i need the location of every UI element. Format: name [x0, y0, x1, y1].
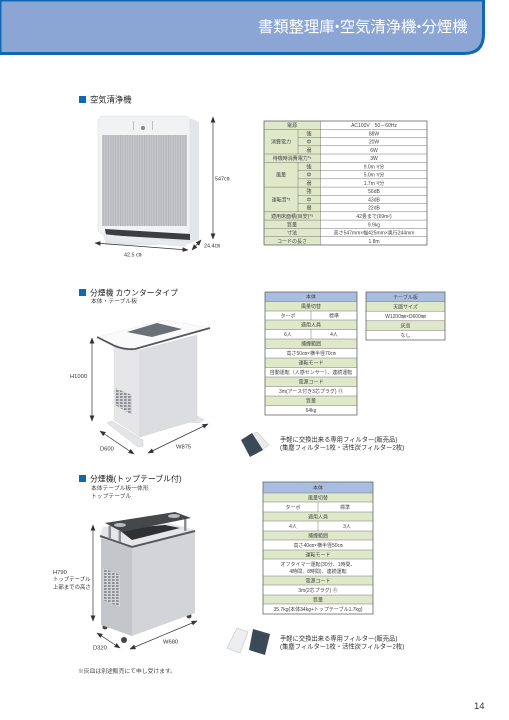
table: top table main body: オフタイマー運転(30分、1時間、: [280, 561, 356, 568]
table: air purifier specs: 風量: [276, 172, 286, 179]
table: top table main body: 風量切替: [308, 494, 328, 502]
table: air purifier specs: [264, 121, 427, 245]
table: top table main body: [263, 482, 373, 614]
table: top table main body: 本体: [313, 484, 323, 492]
heading: top table smoke separator: [79, 474, 182, 500]
dimension: width 42.5: [95, 243, 188, 258]
text: filter note 2: [280, 634, 404, 650]
table: air purifier specs: 弱: [306, 206, 312, 212]
table: air purifier specs: 22dB: [368, 206, 380, 212]
table: counter type main body: 64kg: [306, 408, 317, 414]
title: 書類整理庫・空気清浄機・分煙機: [258, 19, 468, 36]
table: air purifier specs: 20W: [369, 140, 379, 146]
table: air purifier specs: 5.0m ³/分: [364, 172, 384, 179]
table: air purifier specs: 1.8m: [368, 239, 380, 245]
dimension: D600: [100, 431, 134, 454]
table: air purifier specs: 中: [306, 139, 312, 146]
table: table board: [366, 292, 445, 340]
table: air purifier specs: 強: [306, 188, 312, 195]
table: top table main body: 適用人員: [308, 514, 328, 520]
heading: top table smoke separator: 分煙機(トップテーブル付): [90, 474, 182, 484]
table: counter type main body: 運転モード: [298, 360, 324, 367]
table: counter type main body: 捕煙範囲: [301, 341, 321, 348]
table: top table main body: 3人: [343, 524, 351, 530]
table: air purifier specs: 強: [306, 130, 312, 137]
table: air purifier specs: AC100V 50－60Hz: [351, 123, 397, 129]
dimension: H790: [53, 525, 93, 621]
table: counter type main body: [265, 292, 357, 415]
dimension: D320: [93, 633, 120, 652]
dimension: D320: D320: [93, 646, 107, 652]
table: counter type main body: 風量切替: [301, 303, 321, 310]
table: air purifier specs: 42畳まで(69m²): [356, 214, 392, 220]
table: air purifier specs: 運転音*²: [272, 196, 291, 204]
table: air purifier specs: 43dB: [368, 198, 380, 204]
heading: air purifier: 空気清浄機: [90, 94, 132, 104]
table: air purifier specs: 中: [306, 172, 312, 179]
table: top table main body: 3m(2芯プラグ) ⑪: [298, 587, 338, 594]
dimension: H1000: H1000: [70, 374, 87, 380]
dimension: W875: [148, 424, 208, 453]
table: counter type main body: 適用人員: [301, 322, 321, 329]
dimension: W680: W680: [163, 640, 178, 646]
heading: top table smoke separator: トップテーブル: [91, 492, 131, 500]
table: air purifier specs: 強: [306, 164, 312, 170]
table: air purifier specs: 待機時消費電力*¹: [273, 155, 312, 162]
table: air purifier specs: 寸法: [287, 230, 297, 236]
table: air purifier specs: 質量: [287, 221, 297, 228]
table: counter type main body: 6人: [284, 332, 292, 338]
dimension: height 547: 547㎝: [215, 176, 230, 182]
table: air purifier specs: コードの長さ: [277, 238, 307, 245]
table: air purifier specs: 1.7m ³/分: [364, 180, 384, 187]
dimension: depth 24.4: [192, 240, 220, 250]
dimension: depth 24.4: 24.4㎝: [204, 244, 220, 250]
table: counter type main body: 質量: [306, 398, 316, 405]
table: top table main body: 標準: [340, 504, 350, 511]
dimension: H790: トップテーブル: [53, 575, 91, 583]
heading: counter type smoke separator: [79, 288, 178, 305]
footnote: ※灰皿は別途販売にて申し受けます。: [78, 667, 176, 675]
dimension: H790: H790: [53, 570, 67, 576]
illustration: air purifier: [98, 116, 199, 247]
table: top table main body: 4人: [289, 524, 297, 530]
table: counter type main body: 電源コード: [298, 379, 324, 386]
table: top table main body: 捕煙範囲: [308, 532, 328, 540]
table: top table main body: 高さ40㎝×横半径50㎝: [293, 542, 343, 549]
text: filter note 2: (集塵フィルター1枚・活性炭フィルター2枚): [280, 642, 404, 650]
table: air purifier specs: 3W: [370, 156, 378, 162]
table: air purifier specs: 弱: [306, 148, 312, 154]
table: air purifier specs: 弱: [306, 181, 312, 187]
table: counter type main body: 自動運転（人感センサー）、連続運転: [270, 369, 352, 376]
table: air purifier specs: 9.0m ³/分: [364, 164, 384, 170]
table: counter type main body: 標準: [329, 312, 339, 320]
table: counter type main body: 本体: [306, 294, 316, 301]
subheading: 本体・テーブル板: [91, 297, 137, 305]
table: counter type main body: 高さ50㎝×横半径70㎝: [286, 350, 336, 357]
text: filter note 1: 手軽に交換出来る専用フィルター(販売品): [280, 434, 397, 444]
table: top table main body: ターボ: [285, 504, 301, 511]
subheading: 本体テーブル板一体形: [91, 484, 149, 492]
table: air purifier specs: 適用床面積(目安)*³: [271, 213, 313, 220]
table: counter type main body: 3m(アース付き3芯プラグ) ⑪: [279, 388, 343, 395]
heading: counter type smoke separator: 分煙機 カウンタータイプ: [90, 288, 178, 298]
dimension: H790: 上部までの高さ: [53, 583, 91, 591]
table: air purifier specs: 中: [306, 196, 312, 204]
table: table board: テーブル板: [393, 294, 418, 301]
table: top table main body: 4時間、8時間)、連続運転: [289, 568, 347, 575]
table: air purifier specs: 6W: [370, 148, 378, 154]
dimension: W680: [130, 621, 197, 649]
table: top table main body: 運転モード: [305, 552, 331, 558]
header banner: [0, 0, 484, 54]
dimension: D600: D600: [100, 446, 114, 452]
table: table board: 天面サイズ: [393, 303, 418, 310]
table: table board: 灰皿: [400, 324, 411, 330]
dimension: height 547: [213, 117, 230, 239]
table: counter type main body: ターボ: [280, 312, 296, 320]
table: top table main body: 電源コード: [305, 578, 331, 584]
illustration: top table unit: [100, 512, 195, 643]
table: air purifier specs: 88W: [369, 131, 379, 137]
icon: filters for top table unit: [227, 628, 270, 655]
page number: 14: [474, 701, 485, 712]
table: air purifier specs: 消費電力: [271, 139, 291, 146]
table: counter type main body: 4人: [330, 332, 338, 338]
table: air purifier specs: 9.9kg: [368, 222, 380, 228]
text: filter note 1: [280, 434, 404, 452]
table: air purifier specs: 56dB: [368, 189, 380, 195]
text: filter note 2: 手軽に交換出来る専用フィルター(販売品): [280, 634, 397, 642]
table: table board: W1200㎜×D600㎜: [385, 314, 426, 320]
dimension: H1000: [70, 338, 92, 421]
table: top table main body: 質量: [313, 596, 323, 604]
table: air purifier specs: 電源: [287, 122, 297, 129]
table: table board: なし: [400, 332, 411, 339]
text: filter note 1: (集塵フィルター1枚・活性炭フィルター2枚): [280, 442, 404, 452]
illustration: counter type unit: [97, 320, 210, 447]
dimension: W875: W875: [176, 444, 191, 450]
icon: filters for counter type: [241, 432, 269, 457]
dimension: width 42.5: 42.5 ㎝: [124, 252, 142, 258]
table: top table main body: 35.7kg(本体34kg+トップテーブル1.7kg): [273, 606, 363, 613]
table: air purifier specs: 高さ547mm×幅425mm×奥行244mm: [334, 230, 414, 236]
